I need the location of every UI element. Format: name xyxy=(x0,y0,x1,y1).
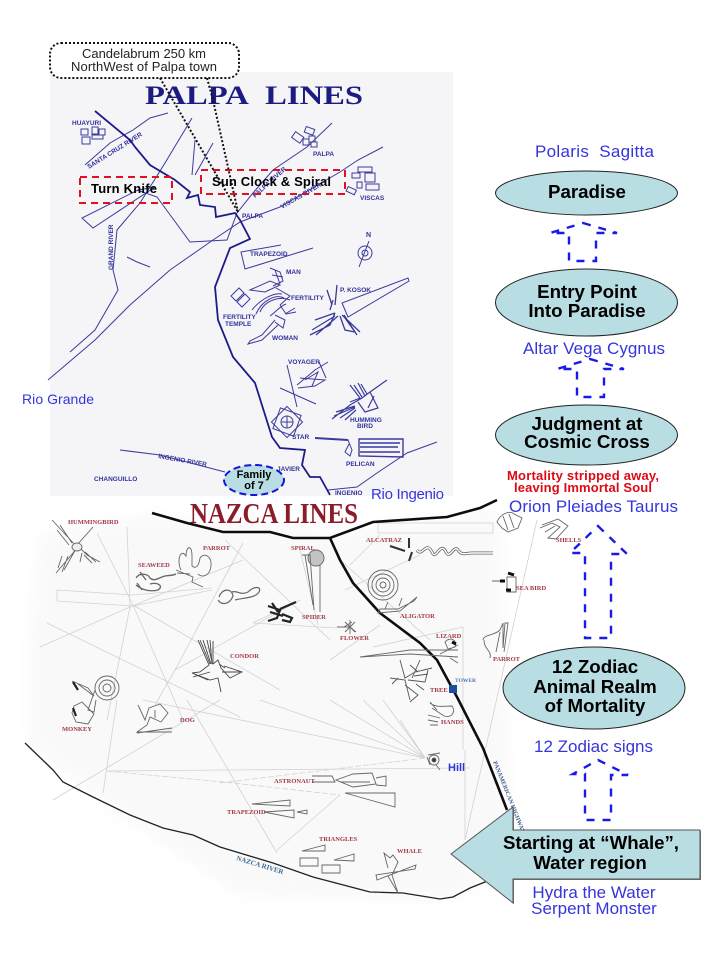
thin river lines xyxy=(48,113,437,490)
Palpa map labels: FERTILITY xyxy=(223,314,257,321)
star label: 12 Zodiac signs: 12 Zodiac signs xyxy=(534,737,653,756)
Nazca figure labels: SHELLS xyxy=(556,537,582,544)
figure: tree xyxy=(390,660,432,702)
callout: Candelabrum: Candelabrum 250 km xyxy=(82,46,206,61)
marker: Family of 7 xyxy=(224,465,284,495)
Palpa map labels: SANTA CRUZ RIVER xyxy=(86,131,144,171)
Palpa map labels: P. KOSOK xyxy=(340,287,371,294)
node: Entry Point: Entry Point xyxy=(537,281,637,302)
Turn Knife geoglyph xyxy=(82,187,155,228)
node: Judgment xyxy=(496,405,678,465)
Palpa map labels: STAR xyxy=(292,434,310,441)
Nazca figure labels: MONKEY xyxy=(62,726,92,733)
arrow: up to Zodiac xyxy=(573,760,628,820)
panel: Palpa lines map xyxy=(48,43,453,497)
figure: lizard xyxy=(360,639,458,663)
star label: Hydra: Hydra the Water xyxy=(532,883,656,902)
node: 12 Zodiac: of Mortality xyxy=(545,695,646,716)
figure: hummingbird xyxy=(52,520,100,573)
Palpa site xyxy=(292,126,317,147)
Nazca figure labels: TREE xyxy=(430,687,448,694)
figure: spiral circle xyxy=(368,570,398,600)
arrow: up to Paradise xyxy=(550,223,617,261)
Palpa map labels: PALPA xyxy=(313,151,334,158)
figure: spider xyxy=(268,602,296,622)
Palpa map labels: HUAYURI xyxy=(72,120,101,127)
Man, Fertility, Woman figures and temple xyxy=(231,268,296,344)
thick river line xyxy=(95,111,330,495)
Palpa map labels: WOMAN xyxy=(272,335,298,342)
marker: Family of 7: Family xyxy=(237,469,272,481)
Palpa map labels: INGENIO RIVER xyxy=(158,453,208,469)
star label: Polaris Sagitta: Polaris Sagitta xyxy=(535,142,655,161)
note: Mortality stripped away: Mortality stripped away, xyxy=(507,468,659,483)
heading: Nazca lines: NAZCA LINES xyxy=(190,498,358,530)
figure: whale xyxy=(376,853,416,893)
Nazca figure labels: DOG xyxy=(180,717,195,724)
Palpa map labels: MAN xyxy=(286,269,301,276)
figure: hands xyxy=(428,702,454,725)
star label: Hydra xyxy=(531,883,657,918)
star label: Hydra: Serpent Monster xyxy=(531,899,657,918)
Nazca figure labels: TRIANGLES xyxy=(319,836,358,843)
panel: Nazca lines map xyxy=(25,498,582,900)
Palpa map labels: VOYAGER xyxy=(288,359,320,366)
Nazca figure labels: ALIGATOR xyxy=(400,613,435,620)
Nazca figure labels: SEA BIRD xyxy=(516,585,546,592)
node: 12 Zodiac: Animal Realm xyxy=(533,676,657,697)
callout box: Turn Knife xyxy=(80,177,172,203)
Nazca River line xyxy=(25,743,495,899)
star label: Altar Vega Cygnus: Altar Vega Cygnus xyxy=(523,339,665,358)
heading: Palpa lines: PALPA LINES xyxy=(145,81,363,110)
figure: parrot right xyxy=(483,623,508,658)
node: 12 Zodiac: 12 Zodiac xyxy=(552,656,638,677)
arrow: up to Entry Point xyxy=(557,359,624,397)
label: Hill: Hill xyxy=(448,762,465,774)
Palpa map labels: HUMMING xyxy=(350,417,382,424)
Nazca figure labels: CONDOR xyxy=(230,653,259,660)
node: Entry Point: Into Paradise xyxy=(528,300,646,321)
label: Rio Ingenio: Rio Ingenio xyxy=(371,486,444,503)
Palpa map labels: GRAND RIVER xyxy=(108,224,115,270)
node: Entry Point xyxy=(496,269,678,336)
callout box: Sun Clock and Spiral xyxy=(201,170,345,194)
Voyager figure xyxy=(280,362,328,407)
Palpa map labels: VISCAS xyxy=(360,195,385,202)
callout box: Sun Clock and Spiral: Sun Clock & Spiral xyxy=(212,174,331,189)
Nazca figure labels: SEAWEED xyxy=(138,562,170,569)
Hummingbird figure xyxy=(332,380,387,420)
figure: bird at top right xyxy=(497,512,522,532)
figure: monkey xyxy=(72,676,119,724)
Palpa map labels: TRAPEZOID xyxy=(250,251,288,258)
note: Mortality stripped away xyxy=(507,468,659,495)
Nazca figure labels: ASTRONAUT xyxy=(274,778,315,785)
Palpa map labels: CHANGUILLO xyxy=(94,476,137,483)
callout box: Turn Knife: Turn Knife xyxy=(91,181,157,196)
Nazca figure labels: SPIRAL xyxy=(291,545,316,552)
north compass: N xyxy=(366,232,371,239)
thick road and highway xyxy=(152,500,507,810)
arrow: up to Judgment xyxy=(570,526,627,638)
Nazca figure labels: ALCATRAZ xyxy=(366,537,402,544)
callout arrow: Starting at Whale: Water region xyxy=(533,852,647,873)
Nazca figure labels: SPIDER xyxy=(302,614,326,621)
figure: small creature xyxy=(218,588,260,603)
Palpa map labels: PELICAN xyxy=(346,461,375,468)
callout arrow: Starting at Whale: Starting at “Whale”, xyxy=(503,832,679,853)
Nazca figure labels: WHALE xyxy=(397,848,422,855)
Palpa map labels: VISCAS RIVER xyxy=(280,182,323,211)
Palpa map labels: JAVIER xyxy=(277,466,300,473)
figure: spiral xyxy=(302,550,324,612)
Pelican figure xyxy=(315,438,403,457)
node: Judgment: Cosmic Cross xyxy=(524,431,650,452)
callout: Candelabrum: NorthWest of Palpa town xyxy=(71,59,217,74)
P. Kosok figure xyxy=(310,278,409,335)
Nazca figure labels: TRAPEZOID xyxy=(227,809,266,816)
Nazca figure labels xyxy=(62,519,582,876)
label: Rio Grande: Rio Grande xyxy=(22,391,94,407)
tower marker xyxy=(449,685,457,693)
Nazca figure labels: PARROT xyxy=(203,545,231,552)
figure: astronaut xyxy=(312,773,386,787)
flow: journey to paradise xyxy=(451,142,701,918)
marker: Family of 7: of 7 xyxy=(244,480,264,492)
Huayuri site xyxy=(81,127,105,144)
Palpa map labels: PALPA xyxy=(242,213,263,220)
star label: Orion Pleiades Taurus: Orion Pleiades Taurus xyxy=(509,497,678,516)
Nazca figure labels: PARROT xyxy=(493,656,521,663)
Nazca figure labels: LIZARD xyxy=(436,633,462,640)
figure: triangles group xyxy=(300,845,354,873)
figure: trapezoid triangles xyxy=(252,793,395,818)
Nazca figure labels: NAZCA RIVER xyxy=(235,854,285,876)
node: Judgment: Judgment at xyxy=(531,413,643,434)
Nazca figure labels: PANAMERICAN HIGHWAY xyxy=(491,761,526,835)
Star figure xyxy=(271,406,303,438)
Palpa map labels: FERTILITY xyxy=(291,295,325,302)
figure: alligator xyxy=(378,597,417,613)
north compass xyxy=(358,232,372,267)
Palpa map labels xyxy=(72,120,385,497)
figure: parrot xyxy=(176,548,211,587)
Trapezoid geoglyph xyxy=(241,245,313,269)
Palpa map labels: INGENIO xyxy=(335,490,362,497)
node: 12 Zodiac xyxy=(503,647,685,729)
node: Paradise: Paradise xyxy=(548,181,626,202)
Palpa map labels: PALPA RIVER xyxy=(252,166,288,199)
figure: seaweed xyxy=(136,572,176,591)
callout: Candelabrum xyxy=(50,43,239,212)
Palpa map labels: BIRD xyxy=(357,423,373,430)
Nazca figure labels: HANDS xyxy=(441,719,464,726)
Nazca figure labels: TOWER xyxy=(455,678,477,684)
figure: owl at hill xyxy=(427,753,440,770)
note: Mortality stripped away: leaving Immortal Soul xyxy=(514,480,652,495)
figure: sea bird xyxy=(492,573,516,592)
figure: condor xyxy=(192,640,242,692)
callout arrow: Starting at Whale xyxy=(451,807,701,904)
figure: flower xyxy=(337,620,356,634)
figure: shells xyxy=(540,519,568,539)
Nazca figure labels: FLOWER xyxy=(340,635,369,642)
figure: alcatraz xyxy=(390,538,493,561)
Nazca figure labels: HUMMINGBIRD xyxy=(68,519,119,526)
Palpa map labels: TEMPLE xyxy=(225,321,252,328)
Viscas site xyxy=(346,167,379,195)
node: Paradise xyxy=(496,171,678,215)
figure: dog xyxy=(137,704,172,733)
